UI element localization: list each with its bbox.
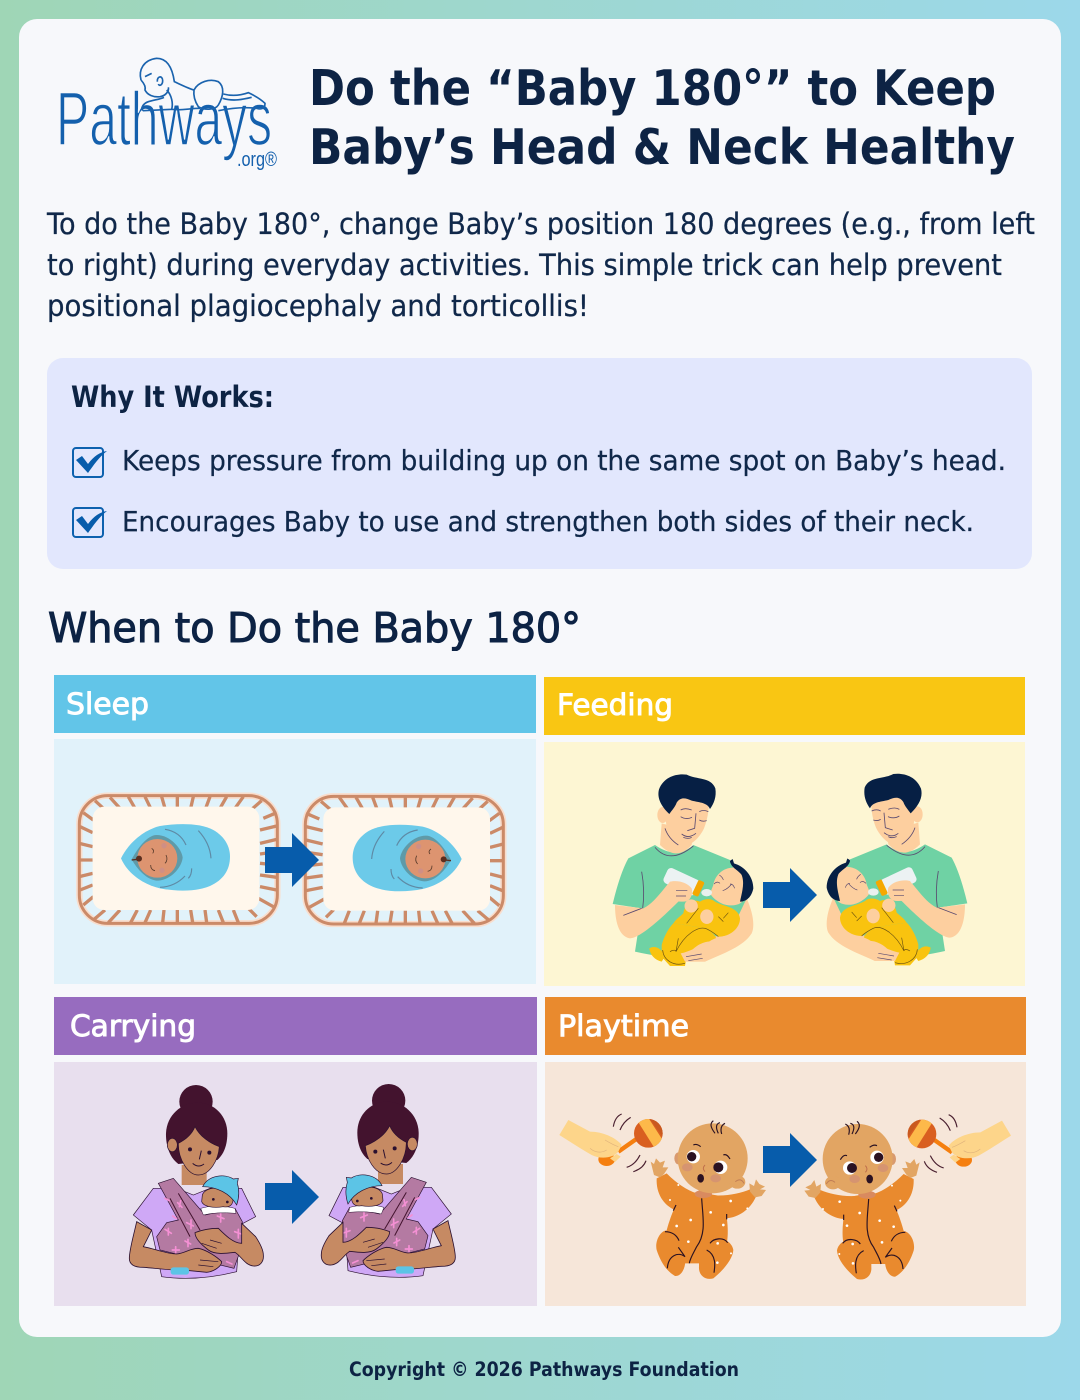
heading: why it works: Why It Works: [71, 380, 274, 414]
logo: Pathways.org: .org® [237, 149, 277, 171]
illustration: crib before and after [79, 796, 503, 924]
panel: feeding [544, 677, 1025, 986]
illustration: baby with rattle [559, 1114, 1011, 1280]
bullet 1: Keeps pressure from building up on the same spot on Baby’s head. [122, 444, 1006, 477]
intro text: positional plagiocephaly and torticollis! [47, 289, 589, 323]
arrow: feeding [763, 868, 817, 922]
bullet 2: Encourages Baby to use and strengthen both sides of their neck. [122, 505, 974, 538]
title [309, 60, 1015, 176]
arrow: sleep [265, 833, 319, 887]
panel: playtime: Playtime [558, 1009, 689, 1043]
panel: feeding: Feeding [557, 688, 673, 722]
title: Do the “Baby 180°” to Keep [309, 60, 996, 117]
panel: carrying: Carrying [70, 1009, 196, 1043]
arrow: playtime [763, 1133, 817, 1187]
arrow: carrying [265, 1170, 319, 1224]
intro text: to right) during everyday activities. This simple trick can help prevent [47, 248, 1002, 282]
illustration: father feeding baby [613, 774, 967, 966]
logo: Pathways.org: Pathways [56, 77, 272, 162]
panel: playtime [545, 997, 1026, 1306]
panel: sleep [54, 675, 536, 984]
title: Baby’s Head & Neck Healthy [309, 119, 1015, 176]
panel: sleep: Sleep [66, 687, 149, 721]
panel: why it works [47, 358, 1032, 569]
panel: carrying [54, 997, 537, 1306]
footer: Copyright © 2026 Pathways Foundation [349, 1358, 739, 1381]
illustration: mother carrying baby in sling [129, 1084, 455, 1278]
section heading: When to Do the Baby 180° [48, 604, 581, 652]
intro text [46, 207, 1035, 323]
logo: Pathways.org [56, 58, 277, 171]
